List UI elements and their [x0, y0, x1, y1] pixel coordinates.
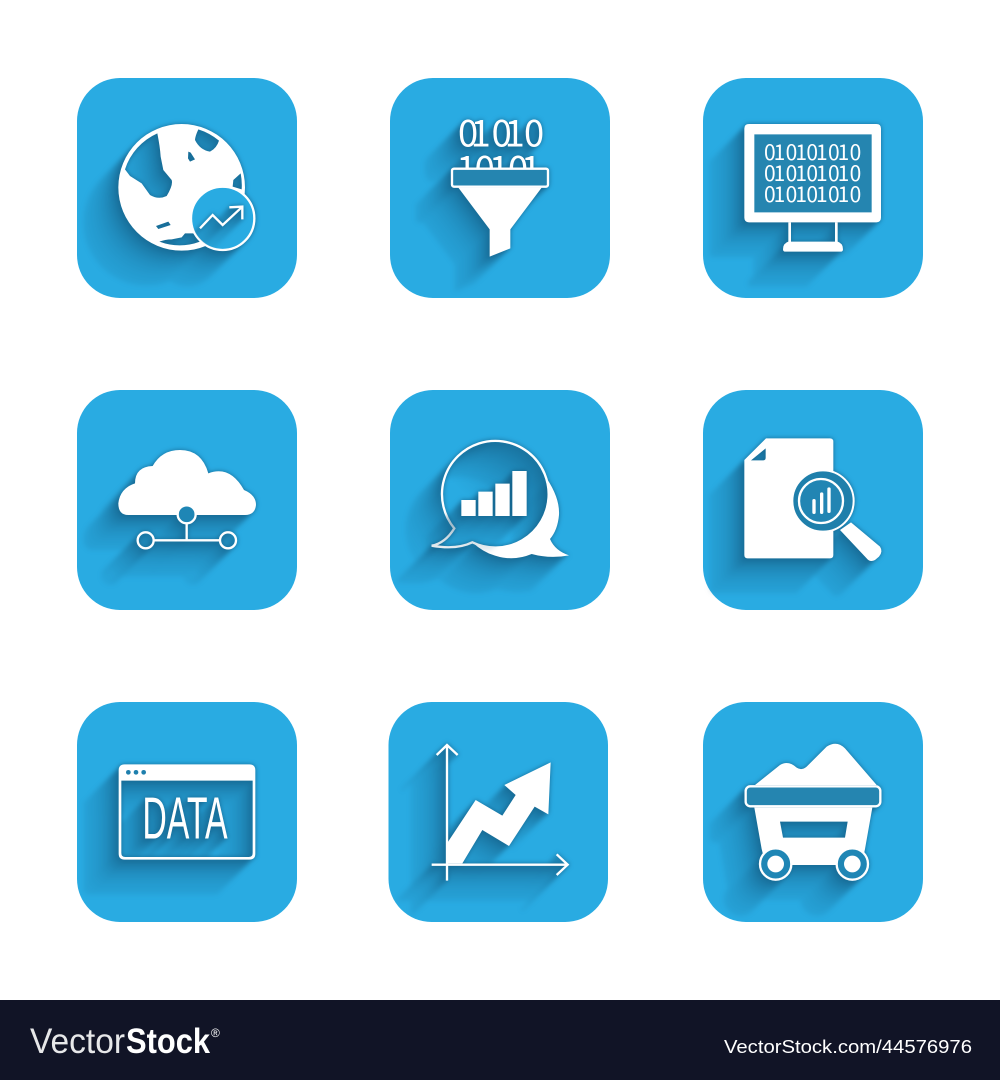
footer logo: [30, 1022, 220, 1061]
icon: browser window with DATA: DATA: [142, 786, 228, 852]
icon: browser window with DATA: [119, 764, 255, 860]
icon: window dots: [126, 770, 146, 775]
icon: monitor with binary code: 010101010: [764, 137, 861, 167]
icon: globe with badge circle: [118, 124, 254, 251]
icon: binary digits and funnel: 10101: [456, 141, 541, 193]
icon: monitor with binary code: 010101010: [764, 179, 861, 209]
panel: document analysis: [703, 390, 923, 610]
icon: cloud with network nodes: [118, 450, 256, 548]
panel: binary monitor: [703, 78, 923, 298]
bubble inner shading: [443, 442, 547, 546]
icon: monitor with binary code: [744, 124, 881, 252]
panel: globe with growth arrow: [77, 78, 297, 298]
icon: mine cart with ore: [746, 744, 880, 880]
footer bar: [0, 1000, 1000, 1080]
icon: monitor with binary code: 010101010: [764, 158, 861, 188]
panel: data funnel: [390, 78, 610, 298]
icon: document and magnifying glass: [744, 438, 881, 561]
icon: binary digits and funnel: [452, 105, 548, 257]
icon: axes and rising arrow: [432, 745, 568, 881]
icon: binary digits and funnel: 01010: [458, 105, 544, 157]
panel: cloud network: [77, 390, 297, 610]
panel: data browser window: [77, 702, 297, 922]
footer logo: ®: [211, 1026, 220, 1040]
icon: speech bubbles: [432, 441, 569, 558]
icon: trending arrow: [200, 207, 242, 228]
panel: growth chart: [388, 702, 608, 922]
footer logo: Vector: [30, 1022, 125, 1061]
footer image id: VectorStock.com/44576976: [724, 1036, 972, 1057]
footer logo: Stock: [126, 1022, 210, 1061]
panel: mine cart: [703, 702, 923, 922]
panel: speech bubbles with bars: [390, 390, 610, 610]
icon: bar chart: [461, 471, 527, 516]
